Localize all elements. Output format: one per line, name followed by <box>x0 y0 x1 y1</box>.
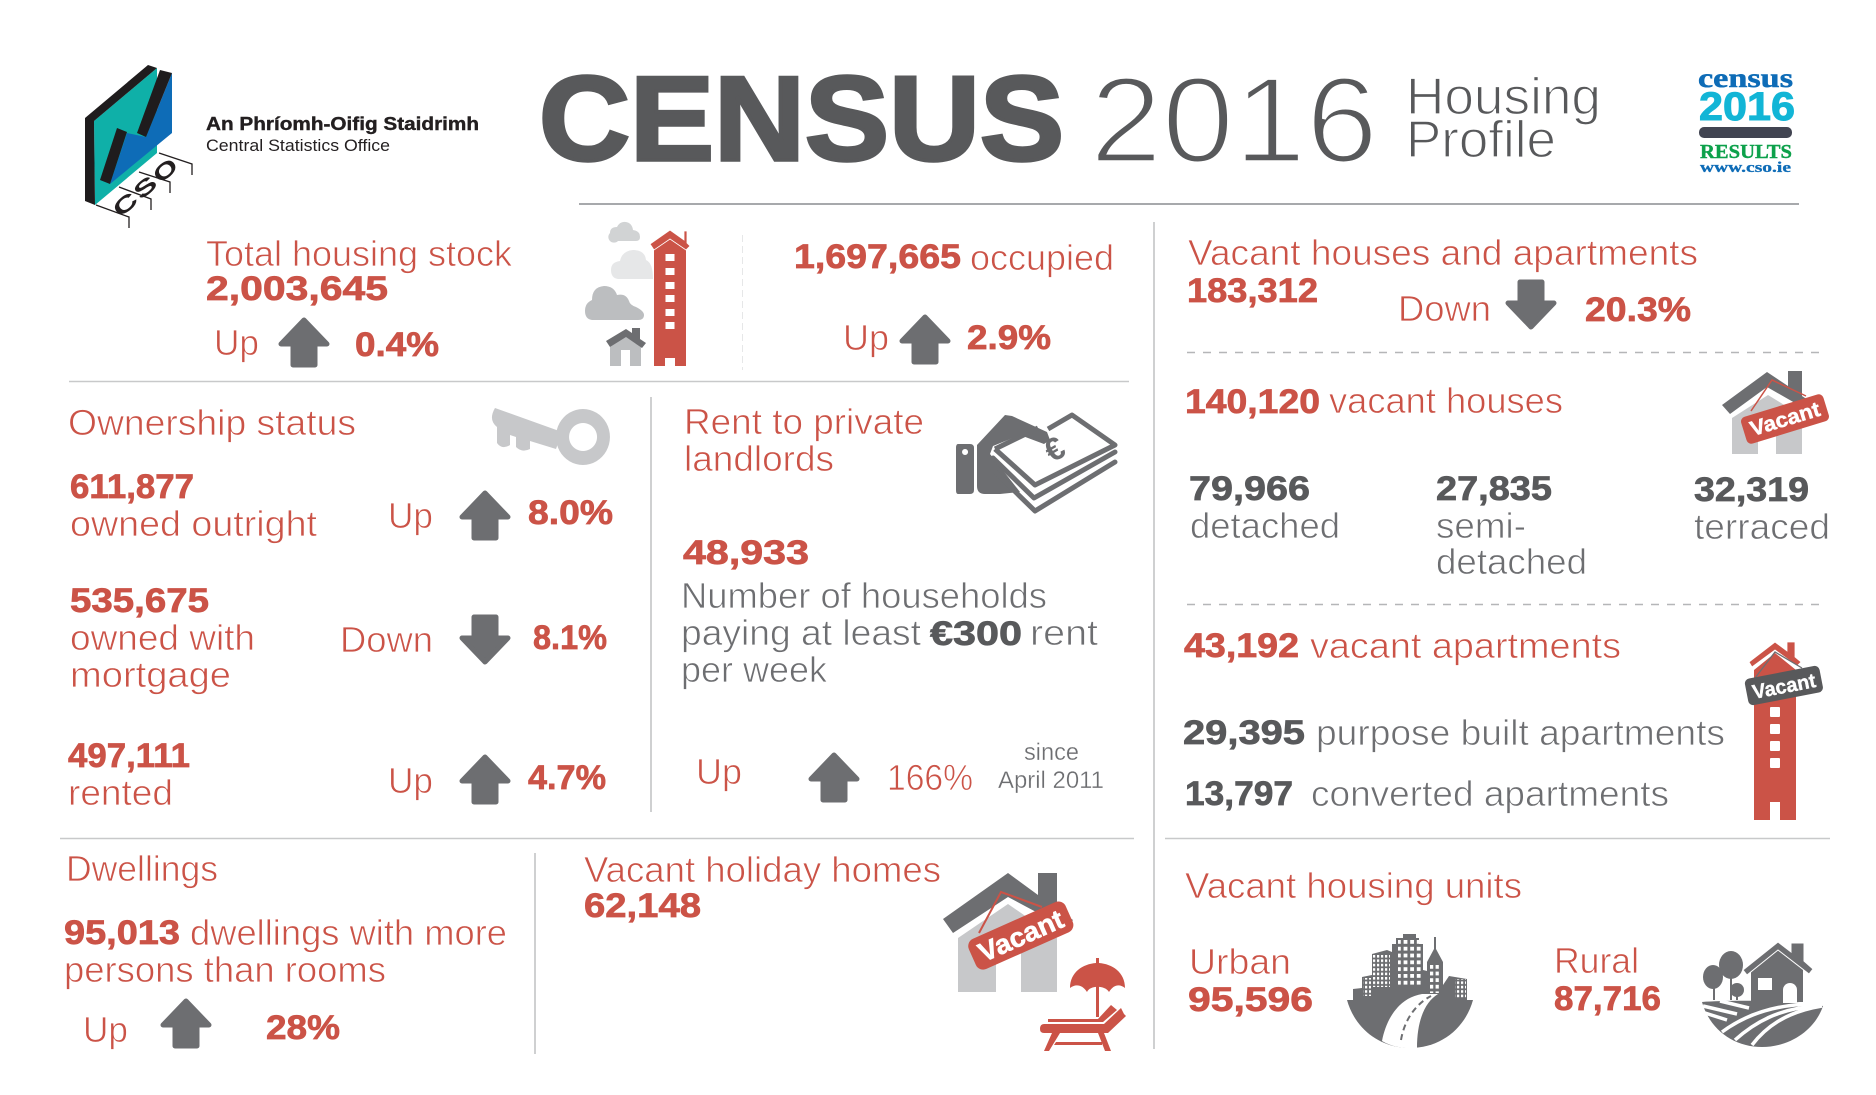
panel: rent to private landlords: 166% <box>887 757 973 798</box>
panel: dwellings: 95,013 <box>64 914 180 952</box>
panel: vacant houses and apartments: 20.3% <box>1585 291 1691 329</box>
title: CENSUS <box>539 52 1064 186</box>
panel: rent to private landlords: paying at least <box>681 612 921 653</box>
panel: ownership status: 8.0% <box>528 494 613 532</box>
organisation name: Central Statistics Office <box>206 136 390 155</box>
panel: vacant houses: terraced <box>1694 506 1830 547</box>
panel: ownership status: 535,675 <box>70 582 209 620</box>
icon: vacant tower <box>1744 642 1824 820</box>
panel: vacant houses and apartments: Down <box>1398 288 1491 329</box>
panel: dwellings: 28% <box>266 1009 340 1047</box>
icon: tower, clouds and house <box>585 222 690 366</box>
panel: vacant houses: 32,319 <box>1694 471 1809 509</box>
panel: vacant houses: detached <box>1436 541 1587 582</box>
panel: ownership status: 611,877 <box>70 468 194 506</box>
panel: ownership status: 497,111 <box>68 737 190 775</box>
panel: vacant housing units: Rural <box>1554 940 1639 981</box>
panel: ownership status: Ownership status <box>68 402 356 443</box>
icon: vacant holiday house <box>943 873 1076 992</box>
panel: occupied: Up <box>843 317 889 358</box>
panel: vacant housing units: Vacant housing units <box>1185 865 1522 906</box>
panel: ownership status: Up <box>388 760 433 801</box>
icon: parasol and sun lounger <box>1040 958 1126 1051</box>
icon: up arrow <box>462 493 508 538</box>
title: 2016 <box>1090 52 1378 188</box>
panel: rent to private landlords: 48,933 <box>683 534 809 572</box>
panel: dwellings: Up <box>83 1009 128 1050</box>
icon: up arrow <box>281 320 327 365</box>
panel: vacant holiday homes: Vacant holiday homes <box>584 849 941 890</box>
icon: vacant tower: Vacant <box>1751 670 1818 704</box>
panel: rent to private landlords <box>681 401 1115 800</box>
icon: up arrow <box>163 1001 209 1046</box>
panel: dwellings: dwellings with more <box>190 912 507 953</box>
panel: rent to private landlords: rent <box>1030 612 1098 653</box>
icon: vacant house: Vacant <box>1747 398 1823 441</box>
panel: vacant apartments: converted apartments <box>1311 773 1669 814</box>
census 2016 results badge: census <box>1698 63 1793 93</box>
panel: dwellings: Dwellings <box>66 848 218 889</box>
panel: ownership status: 4.7% <box>528 759 606 797</box>
panel: vacant houses and apartments <box>1187 232 1698 329</box>
CSO logo <box>85 65 192 228</box>
CSO logo: S <box>129 171 162 204</box>
panel: vacant apartments: 13,797 <box>1185 775 1293 813</box>
icon: down arrow <box>462 617 508 662</box>
organisation name <box>206 114 479 155</box>
icon: up arrow <box>902 317 948 362</box>
census 2016 results badge <box>1698 63 1795 176</box>
icon: city and road <box>1347 934 1473 1048</box>
panel: vacant apartments: 43,192 <box>1184 627 1299 665</box>
panel: ownership status: 8.1% <box>533 619 607 657</box>
census 2016 results badge: RESULTS <box>1700 141 1792 163</box>
panel: occupied: 2.9% <box>967 319 1051 357</box>
title <box>539 52 1378 188</box>
panel: total housing stock: Total housing stock <box>206 233 513 274</box>
CSO logo: C <box>108 188 143 222</box>
icon: vacant house <box>1722 371 1830 454</box>
panel: total housing stock: Up <box>214 322 259 363</box>
census 2016 results badge: 2016 <box>1699 85 1795 129</box>
panel: rent to private landlords: €300 <box>930 615 1022 653</box>
panel: vacant houses: semi- <box>1436 505 1526 546</box>
subtitle: Profile <box>1406 111 1556 169</box>
icon: hand holding money: € <box>1038 429 1071 469</box>
panel: total housing stock: 0.4% <box>355 326 439 364</box>
panel: vacant apartments: 29,395 <box>1183 714 1305 752</box>
panel: ownership status: mortgage <box>70 654 231 695</box>
panel: vacant housing units <box>1185 865 1823 1048</box>
panel: rent to private landlords: Number of households <box>681 575 1047 616</box>
panel: rent to private landlords: landlords <box>684 438 834 479</box>
census 2016 results badge: www.cso.ie <box>1700 160 1791 176</box>
panel: vacant holiday homes: 62,148 <box>584 887 701 925</box>
panel: ownership status: Up <box>388 495 433 536</box>
panel: vacant houses: 79,966 <box>1189 470 1310 508</box>
subtitle: Housing <box>1406 68 1601 126</box>
icon: up arrow <box>462 757 508 802</box>
panel: total housing stock: 2,003,645 <box>206 270 388 308</box>
panel: vacant apartments: purpose built apartments <box>1316 712 1725 753</box>
dividers <box>60 204 1830 1054</box>
organisation name: An Phríomh-Oifig Staidrimh <box>206 114 479 134</box>
panel: rent to private landlords: per week <box>681 649 828 690</box>
panel: vacant houses: 27,835 <box>1436 470 1552 508</box>
icon: down arrow <box>1508 282 1554 327</box>
panel: vacant houses and apartments: 183,312 <box>1187 272 1318 310</box>
subtitle <box>1406 68 1601 169</box>
panel: rent to private landlords: since <box>1024 739 1079 766</box>
panel: dwellings: persons than rooms <box>64 949 386 990</box>
panel: vacant houses and apartments: Vacant houses and apartments <box>1188 232 1698 273</box>
icon: rural house and fields <box>1702 942 1823 1047</box>
icon: hand holding money <box>956 415 1115 511</box>
panel: vacant houses: vacant houses <box>1329 380 1563 421</box>
panel: ownership status: Down <box>340 619 433 660</box>
CSO logo: O <box>148 153 183 188</box>
panel: rent to private landlords: Rent to private <box>684 401 924 442</box>
icon: vacant holiday house: Vacant <box>974 904 1068 968</box>
panel: vacant housing units: Urban <box>1189 941 1291 982</box>
panel: occupied <box>794 237 1114 362</box>
panel: dwellings <box>64 848 507 1050</box>
panel: total housing stock <box>206 233 513 365</box>
panel: vacant holiday homes <box>584 849 1126 1051</box>
panel: ownership status <box>68 402 613 813</box>
panel: vacant houses: 140,120 <box>1185 383 1320 421</box>
panel: occupied: 1,697,665 <box>794 238 961 276</box>
panel: ownership status: owned with <box>70 617 255 658</box>
panel: vacant housing units: 87,716 <box>1554 980 1661 1018</box>
icon: up arrow <box>811 755 857 800</box>
panel: occupied: occupied <box>970 237 1114 278</box>
panel: vacant houses: detached <box>1190 505 1340 546</box>
panel: rent to private landlords: Up <box>696 751 742 792</box>
panel: vacant apartments <box>1183 625 1824 820</box>
icon: key <box>492 408 610 465</box>
panel: ownership status: rented <box>68 772 173 813</box>
panel: vacant apartments: vacant apartments <box>1310 625 1621 666</box>
panel: vacant housing units: 95,596 <box>1188 981 1313 1019</box>
panel: ownership status: owned outright <box>70 503 317 544</box>
panel: vacant houses <box>1185 371 1830 582</box>
panel: rent to private landlords: April 2011 <box>998 767 1104 794</box>
